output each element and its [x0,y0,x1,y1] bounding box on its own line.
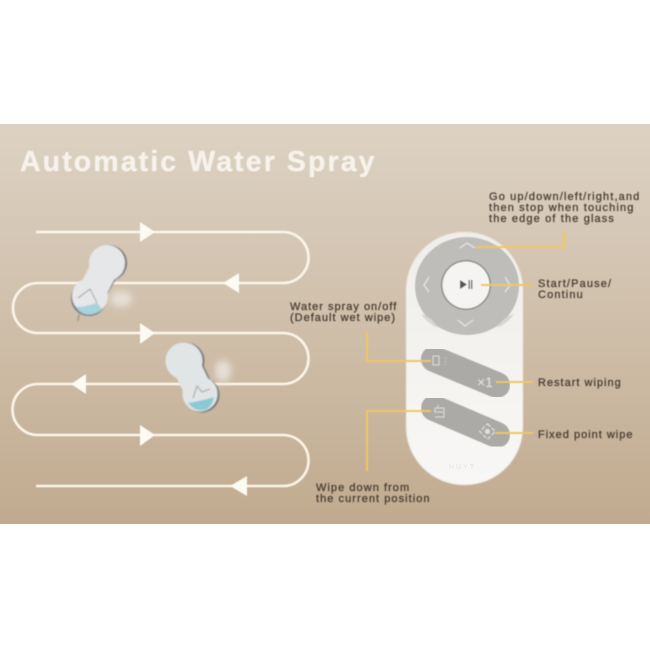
remote control [406,232,523,485]
callout: wipe down: the current position [316,493,431,505]
serpentine path with arrows [13,222,309,496]
callout: start pause: Continu [538,289,584,301]
brand mark: HUYT [449,464,476,471]
callout leader lines [367,231,564,471]
spray and restart pill button: ×1 [477,374,493,390]
background band [0,124,650,524]
callout: direction keys: the edge of the glass [489,213,615,225]
callout: restart wiping: Restart wiping [538,377,622,389]
spray and restart pill button [433,356,497,390]
callout: wipe down: Wipe down from [316,482,410,494]
robot 1 [72,246,132,321]
callout: direction keys: Go up/down/left/right,and [489,191,640,203]
callout: start pause: Start/Pause/ [538,278,612,290]
title: Automatic Water Spray [20,146,377,178]
callout: direction keys: then stop when touching [489,202,634,214]
callout: water spray: (Default wet wipe) [290,312,396,324]
spray and restart pill button: ⋮ [441,356,450,366]
play/pause button [441,260,491,310]
robot 2 [166,343,231,412]
callout: water spray: Water spray on/off [290,301,397,313]
callout: fixed point wipe: Fixed point wipe [538,429,634,441]
direction wheel [415,237,519,335]
wipe-down and fixed-point pill button [434,405,497,439]
